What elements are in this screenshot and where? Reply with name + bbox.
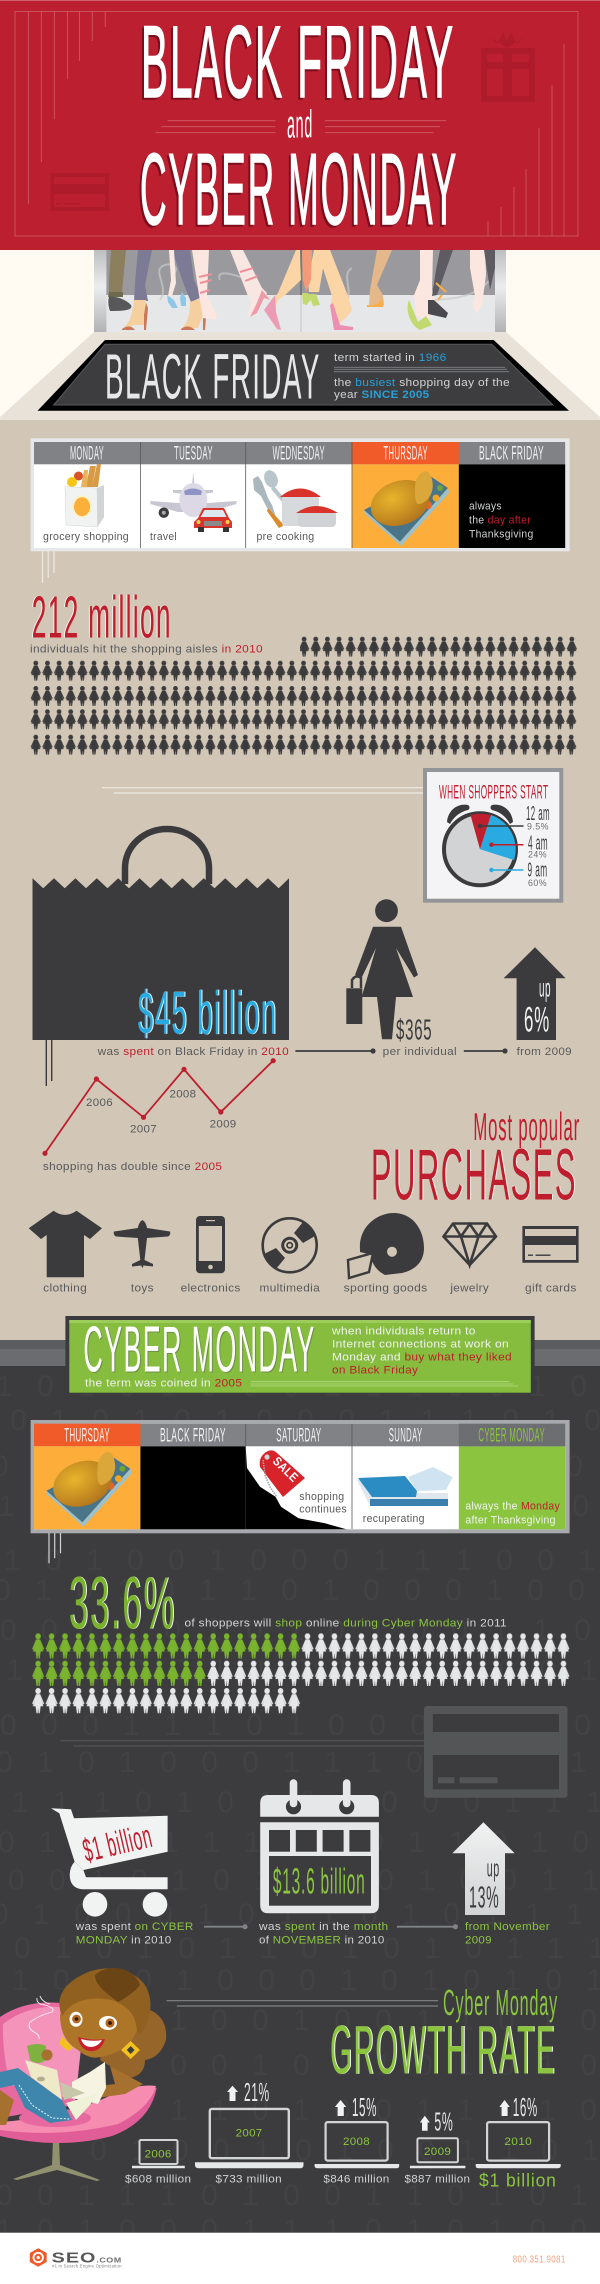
text: explanation: when individuals return to (331, 1325, 476, 1337)
arrow: up 6%: up (539, 975, 551, 1003)
chart: laptop growth 2009: 2009 (424, 2146, 451, 2158)
arrow: connector to per individual (295, 1048, 376, 1054)
chart: laptop growth 2010: 2010 (504, 2136, 532, 2148)
icon: shopping bag with $45 billion (32, 829, 289, 1046)
text: grocery shopping: grocery shopping (43, 531, 129, 543)
legs (109, 250, 126, 292)
chart: laptop growth 2008: $846 million (323, 2173, 390, 2185)
chart: line chart of growth since 2005 (42, 1058, 276, 1173)
text: shopping has doubled: shopping has double since 2005 (43, 1161, 222, 1173)
labels: purchase categories: multimedia (260, 1283, 321, 1295)
panel: footer: .COM (96, 2258, 122, 2265)
text: shopping continues (299, 1491, 347, 1515)
panel: Black Friday doormat banner: year SINCE 2005 (334, 389, 430, 401)
back hair (100, 1985, 166, 2078)
mouth (78, 2037, 105, 2051)
panel: red title header (0, 0, 600, 250)
labels: purchase categories: toys (131, 1283, 154, 1295)
text: always the day after Thanksgiving: the day after (469, 514, 531, 526)
arrow: up 6% (504, 947, 566, 1040)
icon: airplane toy (114, 1220, 170, 1268)
illustration: woman shopping on laptop in pink chair (0, 1968, 166, 2181)
chart: laptop growth 2010: $1 billion (479, 2171, 557, 2191)
chair seat (0, 2088, 157, 2143)
icon: plane and car (150, 472, 236, 532)
arrow: up 6%: 6% (524, 1000, 550, 1040)
chair back (0, 2003, 84, 2118)
day headers: SATURDAY (276, 1425, 322, 1447)
floor mat trapezoid (0, 332, 600, 420)
icon: gift card (522, 1226, 579, 1263)
heading: Cyber Monday growth rate (330, 1982, 558, 2088)
text: from November 2009: from November (465, 1921, 550, 1933)
text: on Cyber Monday (75, 1921, 194, 1946)
panel: when shoppers start clock (425, 770, 561, 901)
text: $13.6 billion (273, 1860, 366, 1901)
icon: bed and pillow (357, 1467, 453, 1506)
arrow: connector to from 2009 (464, 1048, 508, 1054)
text: always the day after Thanksgiving (469, 500, 534, 541)
text: month of November (258, 1921, 388, 1946)
chart: line chart of growth since 2005: 2009 (210, 1119, 236, 1131)
chart: line chart of growth since 2005: 2007 (130, 1124, 157, 1136)
text: on Cyber Monday: MONDAY in 2010 (76, 1934, 172, 1946)
chart: laptop growth 2010 (476, 2094, 561, 2191)
labels: purchase categories: gift cards (525, 1283, 577, 1295)
text: explanation: Monday and buy what they liked (332, 1352, 512, 1364)
text: was spent: was spent on Black Friday in 2010 (97, 1046, 289, 1058)
panel: weekly table before Cyber Monday (31, 1420, 570, 1533)
icon: large credit card (424, 1706, 568, 1798)
pictogram: online shoppers share (31, 1633, 570, 1713)
panel: weekly table before Black Friday (31, 438, 570, 551)
arrow: connector to November (204, 1924, 248, 1929)
text: phone number: 800.351.9081 (513, 2254, 566, 2265)
arrow: up 13%: 13% (469, 1879, 499, 1914)
chart: laptop growth 2010: 16% (513, 2094, 538, 2122)
heading: Most popular purchases (371, 1106, 580, 1215)
text: shopping continues: continues (299, 1503, 347, 1515)
icon: t-shirt (29, 1211, 102, 1277)
arrow: up 13%: up (487, 1856, 500, 1883)
stat: 33.6% of shoppers: 33.6% (70, 1561, 177, 1644)
text: busiest day: the busiest shopping day of the (334, 377, 510, 389)
icon: woman with bag (346, 899, 418, 1039)
chart: laptop growth 2007: $733 million (216, 2173, 282, 2185)
text: per individual: per individual (383, 1046, 457, 1058)
text: always the day after Thanksgiving: always (469, 500, 502, 512)
icon: sale tag (260, 1450, 305, 1497)
icon: sale tag: SALE (270, 1454, 301, 1485)
text: individuals: individuals hit the shopping aisles in 2010 (30, 644, 263, 656)
face (60, 1990, 137, 2058)
icon: shopping cart with $1 billion (51, 1808, 168, 1917)
icon: alarm clock pie (444, 805, 524, 885)
icon: SEO.com hexagon logo (30, 2248, 47, 2267)
text: explanation: on Black Friday (332, 1364, 419, 1376)
text: pre cooking: pre cooking (256, 531, 314, 543)
text: tagline: #1 in Search Engine Optimization (52, 2263, 122, 2268)
day headers: SUNDAY (389, 1425, 422, 1447)
chart: laptop growth 2007: 21% (244, 2079, 270, 2107)
text: recuperating: recuperating (363, 1513, 425, 1525)
day headers: TUESDAY (174, 442, 213, 464)
stat: 212 million: 212 million (32, 584, 172, 650)
day headers: MONDAY (70, 442, 104, 464)
laptop (60, 2082, 85, 2100)
text: $45 billion (138, 979, 278, 1046)
text: travel: travel (150, 531, 177, 543)
text: explanation (331, 1325, 512, 1376)
icon: faint gift (481, 32, 535, 102)
day headers: THURSDAY (384, 442, 428, 464)
illustration: store window with shoppers' legs (94, 250, 506, 332)
day headers (70, 442, 544, 464)
arrow: up 13% (452, 1822, 515, 1915)
clock labels: 9.5% (527, 821, 549, 831)
text: always the day after Thanksgiving: Thanksgiving (469, 529, 534, 541)
icon: grocery bag (65, 464, 104, 527)
icon: football helmet (348, 1213, 424, 1278)
background: tan section (0, 419, 600, 1340)
arm (82, 2066, 143, 2098)
earrings (121, 2041, 140, 2059)
panel: red title header: and (287, 104, 313, 146)
labels: purchase categories: electronics (181, 1283, 241, 1295)
text: SEO.com wordmark: SEO (52, 2251, 96, 2267)
chart: laptop growth 2007: 2007 (236, 2128, 262, 2140)
heading: Cyber Monday (138, 134, 458, 248)
chart: laptop growth 2006 (125, 2140, 191, 2185)
text: from November 2009 (465, 1921, 550, 1946)
day headers: BLACK FRIDAY (160, 1425, 226, 1447)
text: always the Monday: after Thanksgiving (465, 1514, 556, 1526)
chart: laptop growth 2008 (315, 2094, 399, 2185)
icon: compact disc (263, 1218, 317, 1272)
icon: diamond (444, 1224, 496, 1265)
stat: 212 million (30, 584, 263, 656)
icon: turkey (364, 471, 449, 546)
clock labels (526, 803, 550, 888)
arrow: connector to from November (397, 1924, 458, 1929)
chart: laptop growth 2009: 5% (434, 2109, 453, 2137)
text: month of November: of NOVEMBER in 2010 (259, 1934, 385, 1946)
panel: when shoppers start clock: 4 am (528, 832, 548, 854)
stat: 33.6% of shoppers: 33.6% (69, 1561, 176, 1644)
text: shopping continues: shopping (299, 1491, 344, 1503)
panel: when shoppers start clock: 9 am (528, 860, 548, 882)
icon: calendar with $13.6 billion (260, 1779, 379, 1913)
icon: smartphone (196, 1216, 225, 1273)
text: month of November: was spent in the month (258, 1921, 388, 1933)
day headers (64, 1425, 545, 1447)
text: on Cyber Monday: was spent on CYBER (75, 1921, 194, 1933)
icon: cooking pots and utensils (253, 468, 338, 528)
panel: footer (0, 2233, 600, 2284)
chair base (13, 2140, 100, 2181)
steam (29, 1996, 53, 2039)
leg and jeans (0, 2090, 14, 2125)
labels: purchase categories: clothing (43, 1283, 87, 1295)
text: from 2009: from 2009 (517, 1046, 572, 1058)
text: always the Monday (465, 1500, 560, 1526)
text: term started: term started in 1966 (334, 352, 447, 364)
heading: Black Friday (139, 5, 455, 121)
stat: 212 million: 212 million (31, 584, 171, 650)
panel: when shoppers start clock: 12 am (526, 803, 550, 825)
chart: line chart of growth since 2005: 2008 (170, 1088, 196, 1100)
text: $45 billion (139, 979, 278, 1046)
panel: Black Friday doormat banner: BLACK FRIDAY (105, 340, 321, 412)
text: from November 2009: 2009 (465, 1934, 492, 1946)
chart: laptop growth 2006: 2006 (145, 2148, 172, 2160)
text: always the Monday: always the Monday (465, 1500, 560, 1512)
text: coined: the term was coined in 2005 (85, 1378, 242, 1390)
day headers: THURSDAY (64, 1425, 110, 1447)
icon: turkey (46, 1452, 131, 1527)
chart: laptop growth 2008: 15% (352, 2094, 377, 2122)
background: dark section with binary digits (0, 1340, 600, 2247)
labels: purchase categories (43, 1283, 577, 1295)
chart: line chart of growth since 2005: 2006 (86, 1097, 113, 1109)
top and skirt (72, 2062, 106, 2104)
eyes (70, 2012, 82, 2027)
labels: purchase categories: jewelry (449, 1283, 489, 1295)
stat: 33.6% of shoppers (69, 1561, 507, 1644)
chart: laptop growth 2008: 2008 (343, 2136, 370, 2148)
pictogram: rows of shoppers (30, 637, 577, 755)
clock labels: 24% (528, 850, 547, 860)
icon: faint credit card (50, 173, 109, 211)
hair (59, 1968, 150, 2035)
text: $365: $365 (396, 1014, 432, 1046)
background: store entrance cream (0, 250, 600, 420)
chart: laptop growth 2006: $608 million (125, 2173, 191, 2185)
chart: laptop growth 2007 (195, 2079, 304, 2185)
text: explanation: Internet connections at work on (332, 1338, 509, 1350)
day headers: WEDNESDAY (272, 442, 325, 464)
chart: laptop growth 2009: $887 million (404, 2173, 470, 2185)
labels: purchase categories: sporting goods (344, 1283, 428, 1295)
chart: laptop growth 2009 (404, 2109, 470, 2185)
mug and hand (27, 2044, 46, 2063)
clock labels: 60% (528, 878, 547, 888)
text: shop online: of shoppers will shop online during Cyber Monday in 2011 (184, 1618, 507, 1630)
icon: shopping cart with $1 billion: $1 billion (79, 1817, 156, 1869)
